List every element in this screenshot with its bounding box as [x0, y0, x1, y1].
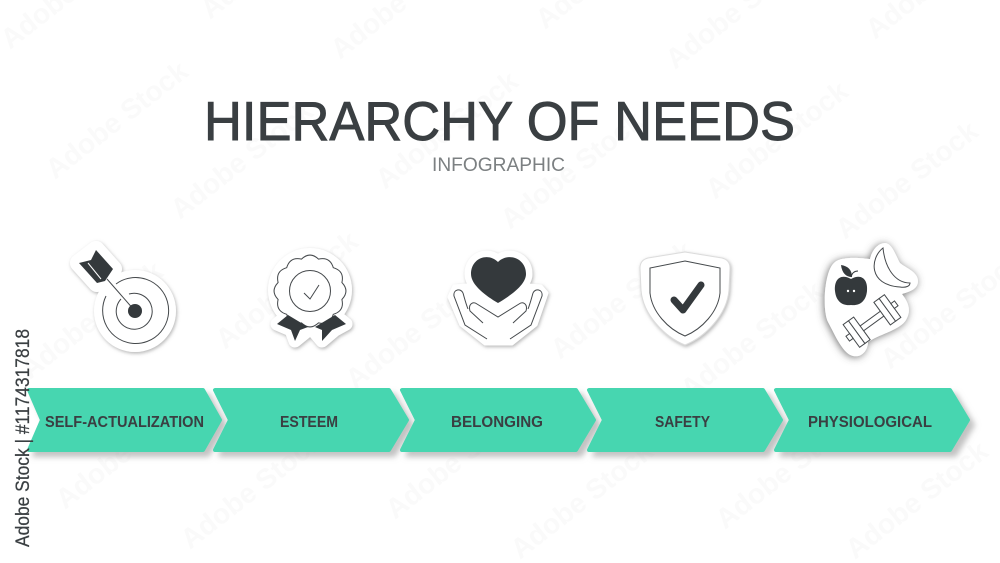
watermark pattern: Adobe Stock — [830, 115, 984, 245]
stock credit: Adobe Stock | #1174317818 — [12, 329, 34, 547]
watermark pattern: Adobe Stock — [545, 235, 699, 365]
icon: apple, moon and dumbbell — [825, 243, 918, 356]
arrow: esteem — [215, 390, 407, 450]
watermark pattern: Adobe Stock — [675, 275, 829, 405]
watermark pattern: Adobe Stock — [370, 65, 524, 195]
watermark pattern: Adobe Stock — [175, 425, 329, 555]
arrow: belonging: BELONGING — [451, 414, 543, 431]
watermark pattern: Adobe Stock — [700, 75, 854, 205]
watermark pattern: Adobe Stock — [505, 435, 659, 563]
watermark pattern: Adobe Stock — [50, 385, 204, 515]
icon: shield with check — [640, 252, 730, 345]
arrow: esteem: ESTEEM — [280, 414, 338, 431]
arrow: belonging — [402, 390, 594, 450]
watermark pattern: Adobe Stock — [15, 255, 169, 385]
icon: award rosette — [268, 248, 352, 341]
icon: target with arrow — [79, 250, 176, 352]
watermark pattern: Adobe Stock — [210, 225, 364, 355]
watermark pattern: Adobe Stock — [165, 95, 319, 225]
arrow: physiological — [776, 390, 968, 450]
watermark pattern: Adobe Stock — [495, 105, 649, 235]
title: HIERARCHY OF NEEDS — [204, 90, 795, 152]
icon: heart in hands — [449, 257, 547, 344]
watermark pattern: Adobe Stock — [840, 435, 994, 563]
arrow: self-actualization: SELF-ACTUALIZATION — [45, 414, 204, 431]
arrow: safety — [589, 390, 781, 450]
watermark pattern: Adobe Stock — [710, 405, 864, 535]
watermark pattern: Adobe Stock — [380, 395, 534, 525]
watermark pattern: Adobe Stock — [40, 55, 194, 185]
subtitle: INFOGRAPHIC — [432, 154, 565, 176]
watermark pattern: Adobe Stock — [340, 265, 494, 395]
arrow: self-actualization — [29, 390, 220, 450]
arrow: physiological: PHYSIOLOGICAL — [808, 414, 932, 431]
arrow: safety: SAFETY — [655, 414, 711, 431]
